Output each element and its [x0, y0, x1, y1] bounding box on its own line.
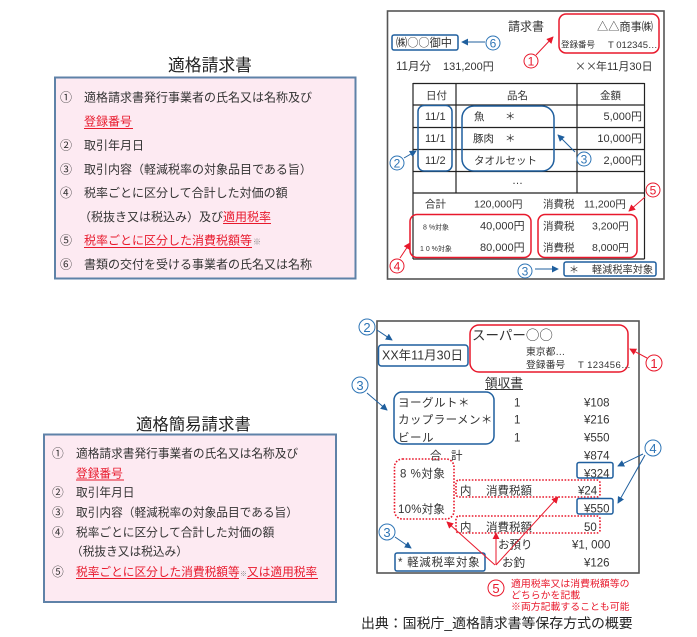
panel: 適格請求書 requirements: 適用税率 [223, 210, 271, 224]
invoice table: 11/2 [425, 155, 446, 167]
invoice table: 120,000円 [474, 198, 522, 210]
highlight: subtotal by rate [410, 214, 531, 258]
receipt items: 合 [430, 450, 442, 462]
invoice table [413, 83, 644, 259]
receipt items: お預り [498, 538, 532, 552]
panel: 適格簡易請求書 requirements: ③ [52, 506, 64, 520]
reduced rate note: ＊ [569, 265, 579, 276]
reduced rate note [564, 262, 656, 276]
red note: どちらかを記載 [511, 590, 580, 602]
panel: 適格簡易請求書 requirements: 税率ごとに区分して合計した対価の額 [76, 526, 275, 540]
receipt items: * 軽減税率対象 [398, 555, 480, 569]
receipt issuer: T 123456… [578, 360, 631, 371]
receipt issuer: スーパー○○ [472, 324, 553, 344]
arrow: 3 to note [535, 268, 558, 270]
panel: 適格請求書 requirements: ③ [60, 162, 72, 176]
marker 5: 5 [650, 184, 657, 198]
invoice table: 11/1 [425, 111, 446, 123]
invoice table: 1 0 %対象 [420, 244, 452, 253]
arrows: 4 to subtotals [618, 454, 645, 503]
reduced rate note: 軽減税率対象 [592, 263, 653, 276]
panel: 適格請求書 requirements: 取引年月日 [84, 138, 144, 152]
invoice issuer [559, 14, 659, 53]
invoice table: ＊ [505, 133, 516, 145]
marker 5 [646, 183, 660, 198]
invoice title: 請求書 [508, 20, 544, 34]
receipt items: 10%対象 [398, 503, 445, 516]
receipt items: ¥126 [583, 558, 610, 570]
invoice issuer: 登録番号 [561, 40, 596, 50]
panel: 適格簡易請求書 requirements: ① [52, 448, 64, 460]
panel: 適格請求書 requirements [55, 78, 356, 278]
panel: invoice sample [388, 11, 664, 279]
highlight: items [462, 106, 554, 171]
marker 6 [486, 36, 500, 50]
receipt items: 内 [460, 484, 472, 498]
marker 3 [379, 524, 395, 540]
receipt issuer: 登録番号 [526, 358, 565, 371]
arrow: 1 to issuer [536, 37, 553, 55]
panel: 適格請求書 requirements: （税抜き又は税込み）及び [79, 210, 223, 224]
receipt items: お釣 [502, 556, 525, 570]
marker 3: 3 [356, 378, 364, 393]
highlight: dates [418, 106, 452, 171]
invoice table: 80,000円 [480, 242, 525, 254]
marker 6: 6 [490, 36, 497, 50]
source credit: 出典：国税庁_適格請求書等保存方式の概要 [361, 615, 633, 631]
marker 1: 1 [528, 54, 535, 68]
arrow: 6 to addressee [462, 41, 485, 43]
panel: 適格請求書 requirements: 書類の交付を受ける事業者の氏名又は名称 [84, 256, 312, 272]
panel: invoice sample: 131,200円 [443, 61, 494, 73]
invoice table: 2,000円 [603, 155, 642, 167]
marker 2 [390, 156, 404, 170]
receipt items: ビール [398, 432, 434, 444]
marker 1: 1 [650, 356, 658, 371]
receipt date [378, 345, 468, 366]
marker 1 [646, 355, 662, 371]
panel: 適格簡易請求書 requirements: ⑤ [52, 566, 64, 579]
panel: receipt sample [352, 319, 662, 613]
receipt items: 1 [514, 414, 520, 426]
invoice table: 10,000円 [597, 133, 642, 145]
marker 5: 5 [492, 581, 500, 596]
title: 適格簡易請求書: 適格簡易請求書 [136, 416, 251, 434]
panel: 適格簡易請求書 requirements: 適格請求書発行事業者の氏名又は名称及び [76, 446, 298, 460]
panel: 適格請求書 requirements: 適格請求書発行事業者の氏名又は名称及び [84, 90, 312, 104]
receipt items: 消費税額 [486, 484, 532, 498]
marker 3: 3 [383, 525, 391, 540]
panel: 適格簡易請求書 requirements: 又は適用税率 [247, 565, 317, 579]
marker 3 [518, 264, 532, 278]
marker 4 [645, 440, 661, 456]
marker 2: 2 [394, 156, 401, 170]
receipt title: 領収書 [485, 376, 523, 390]
invoice table: ＊ [505, 111, 516, 123]
panel: 適格簡易請求書 requirements: ④ [52, 526, 64, 540]
panel: 適格請求書 requirements: 税率ごとに区分した消費税額等 [84, 232, 252, 248]
receipt items [394, 392, 610, 570]
marker 4 [390, 259, 404, 274]
receipt items: ¥550 [583, 432, 610, 444]
invoice addressee: ㈱○○御中 [396, 34, 452, 50]
invoice table: 日付 [426, 89, 447, 102]
arrow: 3 to note [395, 537, 411, 548]
arrows: 5 to rate and tax fields [447, 497, 558, 565]
invoice table: 3,200円 [592, 220, 629, 232]
receipt items: 50 [584, 522, 597, 534]
receipt items: ¥24 [577, 486, 598, 498]
arrow: 1 to issuer [630, 349, 647, 358]
marker 5 [488, 580, 504, 596]
invoice amount: 11月分 [396, 60, 431, 73]
invoice table: 消費税 [543, 220, 575, 232]
invoice table: 11,200円 [584, 198, 626, 210]
invoice table: 品名 [507, 89, 528, 102]
invoice date: × [575, 58, 586, 74]
receipt items: ¥550 [583, 504, 610, 516]
invoice date [575, 58, 653, 74]
panel: 適格請求書 requirements: 取引内容（軽減税率の対象品目である旨） [84, 162, 312, 176]
receipt items: 1 [514, 398, 520, 410]
highlight: rates [394, 459, 454, 519]
receipt items: 計 [451, 448, 463, 462]
arrow: 2 to date [377, 330, 392, 340]
invoice table: 40,000円 [480, 220, 525, 232]
invoice table: 8,000円 [592, 242, 629, 254]
marker 2 [359, 319, 375, 335]
receipt items: 消費税額 [486, 520, 532, 534]
marker 1 [524, 54, 538, 68]
arrow: 3 to items [367, 393, 387, 410]
invoice table: … [512, 175, 523, 187]
arrow: 3 to items [558, 135, 575, 152]
highlight: tax 1 [456, 480, 600, 497]
invoice date: 年11月30日 [596, 59, 653, 73]
receipt items: ヨーグルト＊ [398, 396, 470, 410]
marker 3: 3 [522, 264, 529, 278]
invoice table: 消費税 [543, 241, 575, 254]
marker 4: 4 [649, 441, 657, 456]
panel: 適格請求書 requirements: ※ [253, 238, 261, 246]
highlight: reduced rate note [395, 553, 485, 571]
panel: 適格簡易請求書 requirements: 税率ごとに区分した消費税額等 [76, 565, 240, 579]
title: 適格請求書: 適格請求書 [168, 56, 252, 75]
panel: 適格請求書 requirements: ⑥ [60, 258, 72, 272]
red note: 適用税率又は消費税額等の [511, 577, 630, 590]
marker 4: 4 [394, 260, 401, 274]
panel: 適格簡易請求書 requirements: ② [52, 486, 64, 500]
panel: 適格請求書 requirements: ⑤ [60, 234, 72, 248]
highlight: tax by rate [538, 214, 637, 258]
panel: 適格請求書 requirements: ① [60, 90, 72, 104]
receipt items: 1 [514, 432, 520, 444]
marker 3: 3 [581, 152, 588, 166]
marker 3 [577, 152, 591, 166]
receipt items: 内 [460, 520, 472, 534]
receipt issuer [470, 324, 631, 372]
invoice table: 8 %対象 [423, 222, 449, 232]
invoice table: 豚肉 [473, 132, 494, 145]
invoice table: 消費税 [543, 198, 575, 210]
highlight: subtotal 8% [577, 462, 613, 478]
receipt items: ¥324 [583, 468, 610, 480]
arrow: 2 to dates [404, 151, 416, 158]
arrow: 4 to subtotal [400, 243, 410, 258]
receipt items: ¥874 [583, 450, 610, 462]
receipt items: 8 %対象 [400, 468, 445, 480]
marker 3 [352, 377, 368, 393]
receipt items: ¥1, 000 [571, 540, 610, 552]
panel: 適格簡易請求書 requirements: 取引年月日 [76, 486, 134, 500]
highlight: subtotal 10% [577, 498, 613, 514]
panel: 適格簡易請求書 requirements: 登録番号 [76, 466, 123, 480]
invoice issuer: △△商事㈱ [597, 18, 653, 34]
panel: 適格簡易請求書 requirements: （税抜き又は税込み） [71, 544, 188, 558]
panel: 適格請求書 requirements: 税率ごとに区分して合計した対価の額 [84, 185, 288, 200]
red note [511, 577, 630, 613]
marker 2: 2 [363, 320, 371, 335]
red note: ※両方記載することも可能 [511, 600, 630, 613]
invoice table: 合計 [425, 198, 446, 210]
receipt date: XX年11月30日 [382, 348, 463, 362]
arrow: 5 to tax [629, 197, 645, 211]
panel: 適格請求書 requirements: ④ [60, 186, 72, 200]
receipt items: ¥108 [583, 398, 610, 410]
invoice table: 5,000円 [603, 111, 642, 123]
highlight: tax 2 [456, 516, 600, 533]
receipt issuer: 東京都… [526, 345, 565, 358]
invoice date: × [586, 58, 597, 74]
panel: 適格簡易請求書 requirements [44, 434, 336, 602]
panel: 適格請求書 requirements: 登録番号 [84, 114, 132, 128]
invoice table: 11/1 [425, 133, 446, 145]
receipt items: ¥216 [583, 414, 610, 426]
panel: 適格請求書 requirements: ② [60, 138, 72, 152]
invoice table: 金額 [600, 89, 621, 102]
invoice issuer: T 012345… [608, 40, 657, 51]
panel: 適格簡易請求書 requirements: ※ [240, 570, 247, 578]
panel: 適格簡易請求書 requirements: 取引内容（軽減税率の対象品目である旨） [76, 506, 298, 520]
invoice table: タオルセット [474, 155, 537, 167]
invoice table: 魚 [474, 110, 485, 123]
receipt items: カップラーメン＊ [398, 414, 493, 426]
